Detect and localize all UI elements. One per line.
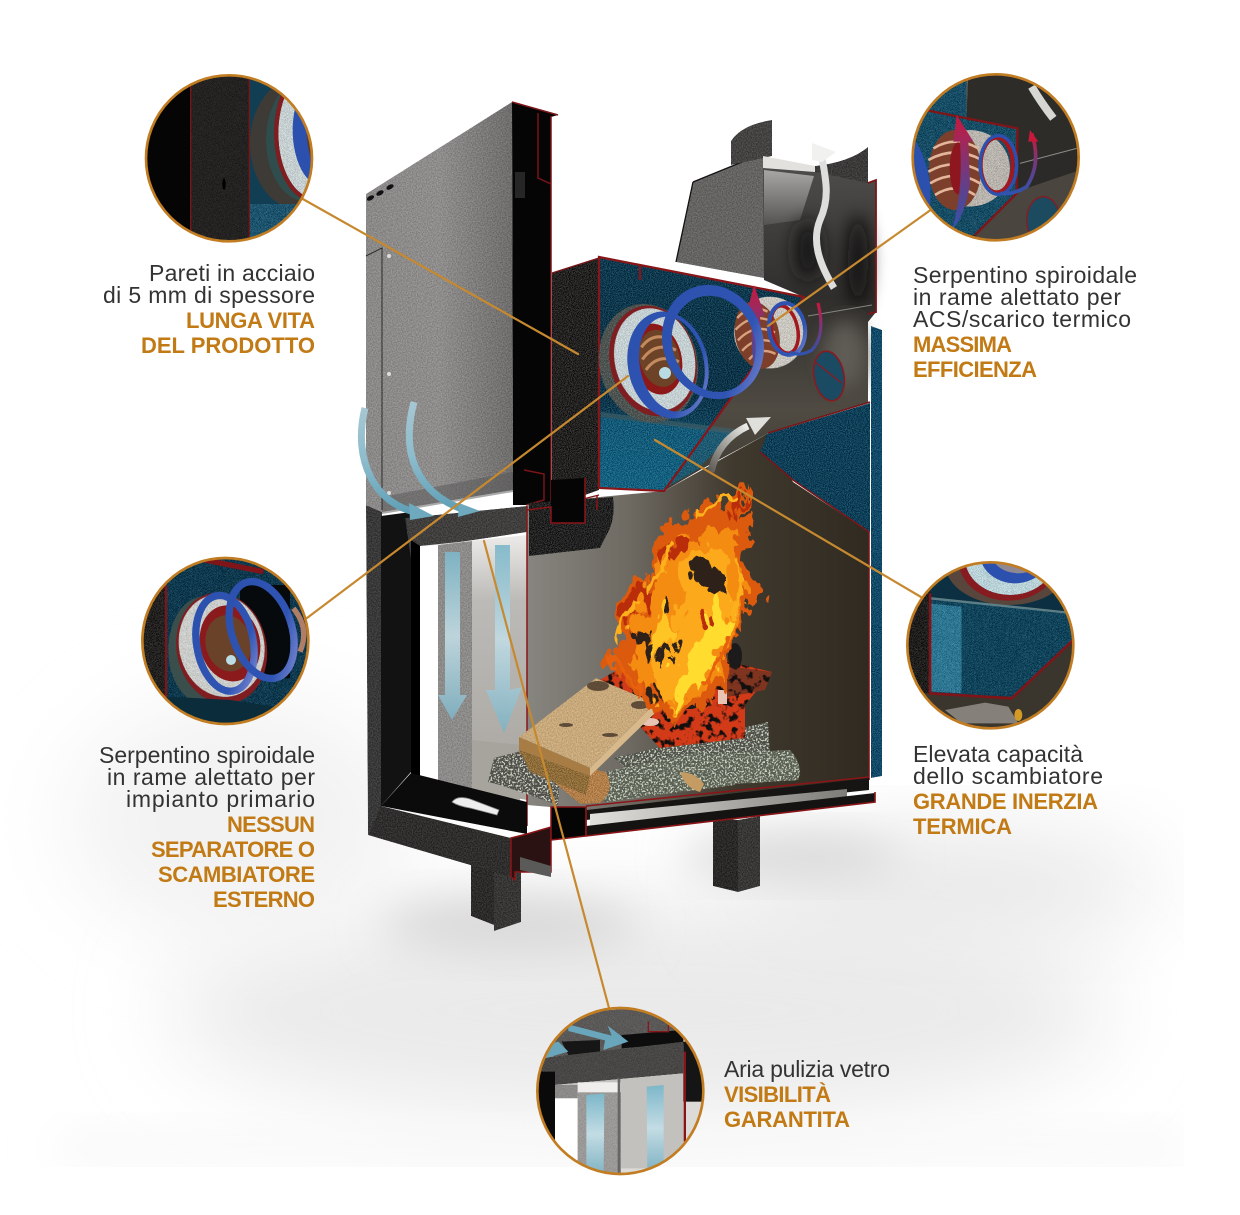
detail circle: ACS coil [910, 72, 1083, 245]
tall left steel wall [366, 102, 513, 512]
coil centre pipe [659, 367, 671, 379]
baffle [529, 497, 614, 556]
coil 1 [586, 293, 710, 433]
blue water chamber face [599, 257, 804, 491]
text block: exchanger: TERMICA [913, 814, 1012, 839]
text block: glass [724, 1056, 890, 1132]
fireplace cutaway illustration [140, 65, 1083, 1178]
inspection port [810, 349, 848, 403]
chamber lower shelf highlight [601, 417, 735, 489]
blue helix rings [618, 270, 811, 426]
text block: ACS coil: in rame alettato per [913, 284, 1121, 310]
text block: ACS coil: MASSIMA [913, 332, 1012, 357]
wood logs [488, 643, 800, 805]
white flue arrow [816, 158, 834, 288]
wall shading at base [382, 472, 513, 514]
left yellow tongue [644, 590, 664, 653]
bracket in channel [515, 172, 525, 198]
text block: exchanger: GRANDE INERZIA [913, 789, 1098, 814]
vent slots [366, 183, 395, 202]
charred log top right [720, 665, 772, 698]
text block: glass: VISIBILITÀ [724, 1082, 831, 1107]
air wash arrows in glass [438, 545, 522, 733]
text block: exchanger [913, 741, 1103, 839]
firebox back wall [527, 434, 869, 810]
top door band [405, 506, 527, 560]
fire flames [600, 478, 756, 712]
text block: exchanger: dello scambiatore [913, 763, 1103, 789]
glass window [420, 535, 527, 800]
embers [600, 645, 772, 748]
infographic canvas [96, 73, 1141, 1176]
lower door sill [381, 773, 527, 834]
chamber red outline [599, 257, 804, 491]
small red and blue return arc [790, 303, 821, 354]
front leg [471, 860, 521, 931]
sill red profile [511, 827, 551, 880]
rear legs [713, 816, 760, 892]
white interior of collar [763, 156, 815, 178]
text block: walls [103, 260, 315, 358]
text block: glass: GARANTITA [724, 1107, 850, 1132]
text block: ACS coil [913, 262, 1137, 382]
firebox floor [586, 777, 875, 836]
flue hood [676, 153, 764, 278]
back log [614, 722, 770, 780]
detail circle: glass air wash [535, 1005, 712, 1178]
small branch stub [680, 772, 704, 792]
detail circle: heat exchanger [906, 561, 1075, 730]
window right post [526, 506, 528, 826]
text block: ACS coil: Serpentino spiroidale [913, 262, 1137, 288]
door seam and screws [366, 248, 391, 510]
right outer blue wall [871, 326, 882, 778]
text block: walls: Pareti in acciaio [149, 260, 315, 286]
fine flame wisps [610, 496, 740, 690]
tan log end [518, 752, 610, 804]
blue triangular insulation [760, 403, 870, 532]
text block: walls: LUNGA VITA [186, 308, 315, 333]
detail circle: primary coil [140, 555, 313, 728]
coil 2 [727, 290, 813, 375]
air arrowheads [409, 503, 480, 520]
air intake arrows [361, 402, 468, 513]
grey combustion arrow [711, 426, 748, 472]
sill under plate [520, 857, 551, 877]
flue chamber [664, 168, 876, 491]
bottom post [551, 807, 586, 840]
text block: primary coil: SEPARATORE O [151, 837, 315, 862]
front log [604, 750, 735, 802]
dark gaps in flames [628, 554, 716, 691]
soft floor shadow [96, 719, 1141, 1129]
right log [704, 750, 800, 786]
flue collar left [731, 120, 772, 165]
text block: primary coil: Serpentino spiroidale [99, 742, 315, 768]
plank scorch [559, 681, 649, 737]
leader lines [301, 198, 932, 1008]
text block: primary coil: impianto primario [126, 786, 315, 812]
text block: primary coil: SCAMBIATORE [158, 862, 315, 887]
text block: walls: DEL PRODOTTO [141, 333, 315, 358]
smoke haze in flue [794, 215, 868, 389]
text block: primary coil: ESTERNO [213, 887, 315, 912]
red licks [612, 486, 740, 624]
text block: ACS coil: ACS/scarico termico [913, 306, 1131, 332]
text block: glass: Aria pulizia vetro [724, 1056, 890, 1082]
text block: exchanger: Elevata capacità [913, 741, 1083, 767]
flue divider highlight [808, 305, 872, 316]
split plank [519, 678, 655, 768]
flue collar right [815, 147, 868, 190]
red rising arrow [746, 285, 765, 376]
baffle post [551, 478, 585, 523]
upper flue light panel [764, 170, 814, 225]
ash and rock [488, 750, 560, 805]
text block: primary coil [99, 742, 315, 912]
black side channel [512, 102, 558, 505]
black door column [381, 512, 411, 806]
text block: primary coil: in rame alettato per [107, 764, 315, 790]
text block: ACS coil: EFFICIENZA [913, 357, 1037, 382]
dark insulated side [552, 258, 599, 507]
light ember spots [641, 690, 727, 726]
channel red section outline [512, 102, 558, 507]
text block: walls: di 5 mm di spessore [103, 282, 315, 308]
flue red section [868, 180, 876, 314]
left frame outer [366, 505, 382, 835]
text block: primary coil: NESSUN [227, 812, 315, 837]
charred knots [650, 643, 742, 709]
detail circle: steel walls [144, 74, 314, 243]
door handle [452, 798, 499, 815]
